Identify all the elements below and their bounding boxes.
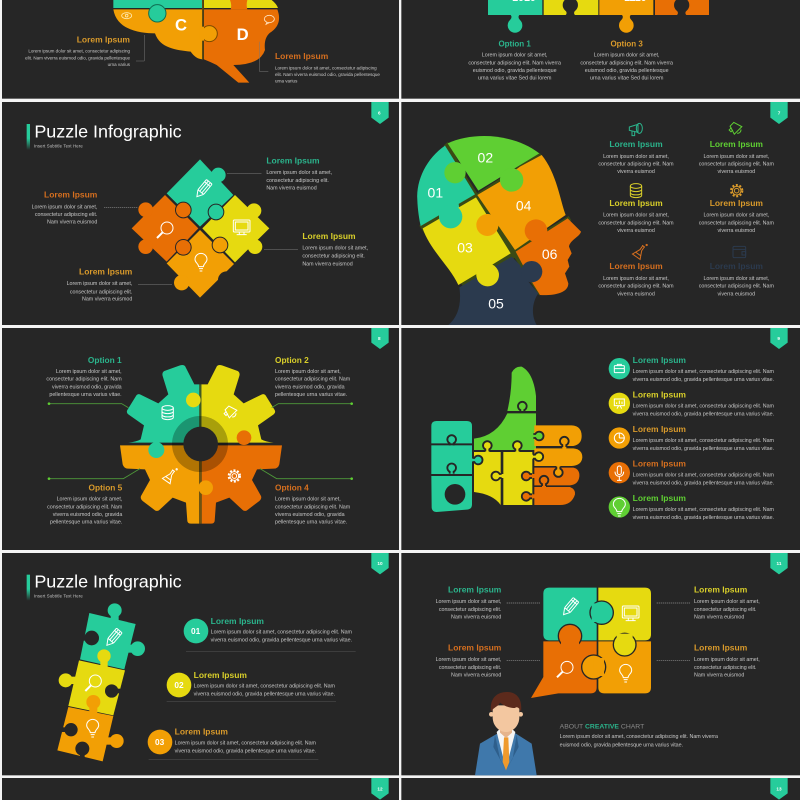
gear tab teal [148,442,164,458]
presenter figure [475,692,537,775]
icon: bulb [87,719,99,737]
text block: top right: Nam viverra euismod [266,186,317,192]
brain puzzle diagram [113,0,279,83]
panel: slide 5 brain fragment [2,0,399,99]
text block: top right [694,585,760,621]
text block: top right [266,156,332,192]
icon: pencil [194,179,212,199]
text block: bottom left [436,643,502,679]
piece: yellow [598,588,651,640]
text block: bottom left: Nam viverra euismod [82,297,132,303]
page badge 12: 12 [377,786,383,791]
list item 5: Lorem ipsum dolor sit amet, consectetur adipiscing elit. Nam [633,507,775,513]
text block: right: consectetur adipiscing elit. [302,254,365,260]
head gap backing [421,143,570,295]
block: wallet: Lorem ipsum dolor sit amet, [703,276,769,282]
head number 05: 05 [488,296,504,312]
block: gear: Lorem ipsum dolor sit amet, [703,213,769,219]
shirt [497,729,515,769]
page badge 8: 8 [378,336,381,341]
about text: euismod odio, gravida pellentesque urna varius vitae. [560,742,683,748]
text block: brain right: elit. Nam viverra euismod odio, gravida pellentesque [275,72,380,77]
piece: dark orange [531,641,597,698]
block: speaker: consectetur adipiscing elit. Nam [699,162,774,168]
text block: option 2: viverra euismod odio, gravida [275,384,345,390]
cuff teal [431,421,472,512]
head puzzle [417,136,581,325]
piece: teal [167,159,233,227]
text block: option 5: consectetur adipiscing elit. Nam [47,504,123,510]
icon: monitor [233,220,250,235]
panel: slide 8 gear [2,328,399,550]
page badge 9 [770,328,788,349]
neck [500,724,512,738]
text block: top left: Nam viverra euismod [451,615,501,621]
item 01 [184,616,356,651]
text block: bottom right [694,643,760,679]
text block: option 5: viverra euismod odio, gravida [53,512,122,518]
text block: top right: Lorem ipsum dolor sit amet, [266,170,332,176]
page badge 12 [371,778,389,800]
head piece 04 [476,155,566,250]
item 02: Lorem ipsum dolor sit amet, consectetur adipiscing elit. Nam [194,684,336,690]
text block: option 1: pellentesque urna varius vitae. [49,392,122,398]
text block: left: Nam viverra euismod [47,220,97,226]
list item 4: Lorem ipsum dolor sit amet, consectetur adipiscing elit. Nam [633,473,775,479]
connectors [507,603,690,661]
lapels [493,735,519,770]
list item 1: viverra euismod odio, gravida pellentesque urna varius vitae. [633,377,774,383]
text block: brain left: Lorem Ipsum [77,34,130,44]
icon: gear [229,470,240,482]
block: megaphone: consectetur adipiscing elit. Nam [598,162,674,168]
item 02: viverra euismod odio, gravida pellentesque urna varius vitae. [194,692,335,698]
text block: option 3: euismod odio, gravida pellentesque [585,68,669,74]
text block: option 2 [275,355,351,398]
text block: option 3: Option 3 [610,40,643,49]
text block: bottom right: Lorem ipsum dolor sit amet, [694,657,760,663]
text block: right: Nam viverra euismod [302,261,353,267]
heading [27,572,182,601]
text block: option 1 [46,355,122,398]
text block: bottom right: Nam viverra euismod [694,673,744,679]
head piece 06 [516,218,581,295]
icon: magnifier [85,675,101,691]
head piece 02 [444,136,539,192]
block: speaker: viverra euismod [718,169,755,175]
text block: bottom left: consectetur adipiscing elit. [70,289,132,295]
text block: top right: Lorem Ipsum [694,585,748,595]
icon: pencil [561,597,579,617]
text block: brain left: urna varius [108,62,131,67]
list item 1: Lorem Ipsum [633,355,686,365]
list item 4: Lorem Ipsum [633,459,686,469]
icon: eye [122,13,132,19]
panel: slide 10 tilted puzzle [2,553,399,775]
block: gear [699,185,774,234]
gear piece orange [120,445,199,524]
text block: option 3: Lorem ipsum dolor sit amet, [594,52,660,58]
block: gear: Lorem Ipsum [710,198,763,208]
item 02 [167,670,336,701]
piece: orange [598,641,651,693]
block: flask: viverra euismod [617,291,655,297]
block: megaphone: Lorem Ipsum [609,139,663,149]
text block: brain right: Lorem Ipsum [275,51,329,61]
list item 2: Lorem Ipsum [633,390,686,400]
page badge 6 [371,102,389,124]
thumb green [474,367,536,450]
text block: right: Lorem ipsum dolor sit amet, [302,246,368,252]
text block: option 1: euismod odio, gravida pellentesque [473,68,557,74]
piece: light orange [167,230,235,298]
text block: option 1: Option 1 [88,355,122,365]
page badge 7 [770,102,788,124]
text block: option 1: Lorem ipsum dolor sit amet, [482,52,548,58]
text block: top right: Lorem ipsum dolor sit amet, [694,599,760,605]
block: wallet: Lorem Ipsum [710,261,763,271]
gear tab dark orange [237,430,251,445]
text block: option 5 [47,482,123,526]
text block: left [32,190,98,226]
text block: option 4 [275,482,351,526]
piece: teal [80,603,145,669]
list item 5: Lorem Ipsum [633,493,686,503]
list item 1 [609,355,775,383]
text block: bottom left [67,267,133,303]
text block: right: Lorem Ipsum [302,231,356,241]
block: flask [598,244,674,297]
item 02: Lorem Ipsum [194,670,247,680]
tab: teal [590,601,613,624]
text block: brain right [275,51,380,84]
text block: top right: Lorem Ipsum [266,156,320,166]
text block: top right: consectetur adipiscing elit. [694,607,756,613]
text block: option 5: pellentesque urna varius vitae. [50,520,122,526]
list item 2 [609,390,775,418]
finger 2 [534,448,582,466]
diamond puzzle [132,159,269,298]
text block: top left [436,585,502,621]
gear tab yellow [186,393,201,407]
text block: top left: Lorem ipsum dolor sit amet, [436,599,501,605]
block: speaker: Lorem Ipsum [710,139,763,149]
block: wallet [699,246,774,297]
text block: option 1 [468,40,561,82]
tab: yellow [613,633,636,656]
block: gear: consectetur adipiscing elit. Nam [699,220,774,226]
block: database: viverra euismod [617,228,655,234]
text block: option 2: consectetur adipiscing elit. Nam [275,377,351,383]
item 03: Lorem Ipsum [175,727,228,737]
page badge 7: 7 [778,111,781,116]
panel: slide 13 fragment [401,778,800,800]
head piece 01 [417,146,475,228]
text block: option 5: Option 5 [89,482,123,492]
block: database: Lorem Ipsum [609,198,663,208]
list item 3 [609,424,775,452]
tie [503,737,509,770]
piece: yellow [59,649,125,715]
piece: dark orange [132,195,198,262]
text block: left: Lorem ipsum dolor sit amet, [32,204,97,210]
list item 2: viverra euismod odio, gravida pellentesque urna varius vitae. [633,412,774,418]
text block: option 3 [580,40,673,82]
text block: brain right: urna varius [275,79,298,84]
green leader lines [48,402,353,480]
text block: option 4: consectetur adipiscing elit. Nam [275,504,351,510]
list item 3: Lorem ipsum dolor sit amet, consectetur adipiscing elit. Nam [633,438,775,444]
gear puzzle [120,365,282,524]
page badge 10: 10 [377,561,383,566]
gear tab orange [198,480,213,495]
tab: orange [582,655,606,679]
item 01: viverra euismod odio, gravida pellentesque urna varius vitae. [211,638,352,644]
piece: teal [543,588,597,640]
panel: slide 11 square puzzle and presenter [401,553,800,775]
page badge 13: 13 [776,786,782,791]
head number 03: 03 [457,240,473,256]
item 03: Lorem ipsum dolor sit amet, consectetur adipiscing elit. Nam [175,740,317,746]
item 03 [148,727,318,759]
text block: option 1: consectetur adipiscing elit. Nam [46,377,122,383]
about heading: ABOUT CREATIVE CHART [560,724,645,731]
block: wallet: consectetur adipiscing elit. Nam [699,284,774,290]
text block: right [302,231,368,267]
text block: top left: Lorem Ipsum [448,585,502,595]
heading [27,121,182,150]
heading: Puzzle Infographic [34,572,182,592]
block: speaker [699,121,774,175]
block: database [598,184,674,234]
head number 01: 01 [428,185,443,201]
icon: pencil [104,628,122,648]
block: speaker: Lorem ipsum dolor sit amet, [703,154,769,160]
icon: magnifier [557,661,573,677]
block: megaphone: viverra euismod [617,169,655,175]
block: flask: consectetur adipiscing elit. Nam [598,284,674,290]
head number 04: 04 [516,198,532,214]
list item 4: viverra euismod odio, gravida pellentesque urna varius vitae. [633,481,774,487]
palm yellow [474,452,532,505]
piece: yellow [202,195,269,262]
icon: speaker [223,404,239,420]
text block: option 2: Option 2 [275,355,309,365]
finger 1 [534,425,582,446]
heading: Insert Subtitle Text Here [34,594,83,599]
panel: slide 6 puzzle diamond [2,102,399,325]
page badge 11: 11 [777,561,782,566]
about text [560,734,718,748]
list item 3: viverra euismod odio, gravida pellentesque urna varius vitae. [633,446,774,452]
square puzzle [531,588,651,698]
suit [475,732,537,775]
connectors [104,173,298,284]
head number 02: 02 [478,149,493,165]
panel: slide 7 head [401,102,800,325]
text block: brain left: elit. Nam viverra euismod odio, gravida pellentesque [25,55,130,60]
head piece 05 [448,257,542,325]
text block: option 4: viverra euismod odio, gravida [275,512,345,518]
tab: dark orange [558,624,582,649]
block: flask: Lorem ipsum dolor sit amet, [603,276,669,282]
connector: brain right [260,42,268,72]
text block: option 3: consectetur adipiscing elit. Nam viverra [580,60,673,66]
text block: option 4: Option 4 [275,482,309,492]
text block: bottom right: consectetur adipiscing elit. [694,665,756,671]
puzzle row [488,0,709,33]
text block: bottom left: Nam viverra euismod [451,673,501,679]
hair [491,692,521,712]
piece: orange [57,695,124,761]
block: flask: Lorem Ipsum [609,261,663,271]
item 01: 01 [191,626,201,636]
text block: option 4: pellentesque urna varius vitae. [275,520,347,526]
text block: option 2: pellentesque urna varius vitae. [275,392,347,398]
finger 4 [534,487,575,505]
icon: chat bubble [264,15,274,24]
block: wallet: viverra euismod [718,291,755,297]
text block: bottom left: Lorem ipsum dolor sit amet, [436,657,501,663]
ears [489,712,523,717]
text block: option 1: urna varius vitae Sed dui lorem [478,76,552,82]
icon: flask [162,468,177,484]
panel: slide fragment options row [401,0,800,99]
text block: top right: consectetur adipiscing elit. [266,178,329,184]
text block: option 1: consectetur adipiscing elit. Nam viverra [468,60,561,66]
list item 4 [609,459,775,487]
text block: bottom left: Lorem ipsum dolor sit amet, [67,281,132,287]
block: database: Lorem ipsum dolor sit amet, [603,213,669,219]
list item 3: Lorem Ipsum [633,424,686,434]
text block: top right: Nam viverra euismod [694,615,744,621]
item 03: 03 [155,737,165,747]
icon: database [162,406,173,420]
block: megaphone: Lorem ipsum dolor sit amet, [603,154,669,160]
face [493,705,519,732]
text block: option 2: Lorem ipsum dolor sit amet, [275,369,341,375]
text block: option 5: Lorem ipsum dolor sit amet, [57,497,122,503]
panel: slide 9 thumbs up [401,328,800,550]
heading: Puzzle Infographic [34,121,182,141]
connector: brain left [136,35,144,61]
brain letter C: C [175,16,187,35]
page badge 13 [770,778,788,800]
brain letter D: D [237,25,249,44]
icon: magnifier [157,222,173,238]
block: megaphone [598,123,674,175]
text block: option 3: urna varius vitae Sed dui lorem [590,76,664,82]
text block: option 4: Lorem ipsum dolor sit amet, [275,497,341,503]
text block: option 1: Lorem ipsum dolor sit amet, [56,369,122,375]
heading: Insert Subtitle Text Here [34,143,83,148]
block: gear: viverra euismod [718,228,755,234]
list item 2: Lorem ipsum dolor sit amet, consectetur adipiscing elit. Nam [633,404,775,410]
list item 5: viverra euismod odio, gravida pellentesque urna varius vitae. [633,515,774,521]
text block: bottom left: consectetur adipiscing elit. [439,665,501,671]
list item 1: Lorem ipsum dolor sit amet, consectetur adipiscing elit. Nam [633,369,775,375]
item 03: viverra euismod odio, gravida pellentesque urna varius vitae. [175,748,316,754]
text block: bottom right: Lorem Ipsum [694,643,748,653]
block: database: consectetur adipiscing elit. Nam [598,220,674,226]
page badge 9: 9 [777,336,780,341]
gear piece teal [127,365,199,443]
head piece 03 [423,197,511,286]
about text: Lorem ipsum dolor sit amet, consectetur adipiscing elit. Nam viverra [560,734,718,740]
text block: brain left: Lorem ipsum dolor sit amet, consectetur adipiscing [28,49,130,54]
icon: bulb [620,664,632,682]
page badge 8 [371,328,389,349]
gear piece yellow [201,365,275,443]
tilted puzzle stack [57,603,145,761]
list item 5 [609,493,775,521]
item 01: Lorem Ipsum [211,616,264,626]
text block: top left: consectetur adipiscing elit. [439,607,501,613]
gear centre ring [172,416,228,472]
head number 06: 06 [542,246,558,262]
item 02: 02 [174,680,184,690]
puzzle tabs [447,402,569,501]
text block: option 1: viverra euismod odio, gravida [52,384,122,390]
text block: bottom left: Lorem Ipsum [79,267,133,277]
icon: bulb [195,253,207,271]
panel: slide 12 fragment [2,778,399,800]
page badge 11 [770,553,788,574]
thumb puzzle [431,367,582,512]
text block: option 1: Option 1 [498,40,531,49]
finger 3 [534,468,579,485]
text block: left: Lorem Ipsum [44,190,98,200]
item 01: Lorem ipsum dolor sit amet, consectetur adipiscing elit. Nam [211,630,353,636]
icon: monitor [622,606,639,621]
text block: brain left [25,34,131,67]
page badge 6: 6 [378,111,381,116]
gear piece dark orange [202,445,282,524]
page badge 10 [371,553,389,574]
text block: brain right: Lorem ipsum dolor sit amet, consectetur adipiscing [275,65,377,70]
text block: left: consectetur adipiscing elit. [35,212,97,218]
text block: bottom left: Lorem Ipsum [448,643,502,653]
